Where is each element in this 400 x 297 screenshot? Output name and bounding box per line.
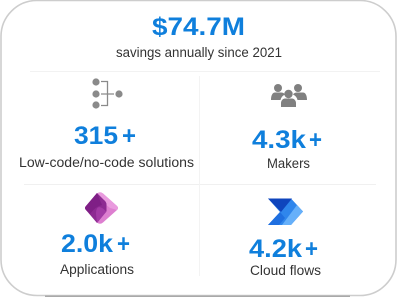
stat: makers count: 4.3k xyxy=(252,126,306,154)
stat: makers count: + xyxy=(309,126,322,154)
headline caption: savings annually since 2021 xyxy=(116,45,282,60)
stat: solutions count: + xyxy=(122,122,136,150)
stat: cloud flows count: + xyxy=(305,235,318,263)
stat: applications count: 2.0k xyxy=(61,230,113,258)
label: makers: Makers xyxy=(267,156,310,171)
icon: Power Automate xyxy=(268,198,303,225)
stat: applications count: + xyxy=(117,230,130,258)
label: solutions: Low-code/no-code solutions xyxy=(19,155,194,170)
icon: solution tree xyxy=(92,78,123,109)
label: cloud flows: Cloud flows xyxy=(250,263,321,278)
icon: Power Apps xyxy=(85,192,118,224)
headline value: $74.7M xyxy=(152,13,245,41)
stat: solutions count xyxy=(74,122,136,150)
stat: cloud flows count: 4.2k xyxy=(249,235,302,263)
icon: makers group xyxy=(271,84,307,107)
label: applications: Applications xyxy=(60,262,134,277)
stat: solutions count: 315 xyxy=(74,122,118,150)
stat: makers count xyxy=(252,126,322,154)
